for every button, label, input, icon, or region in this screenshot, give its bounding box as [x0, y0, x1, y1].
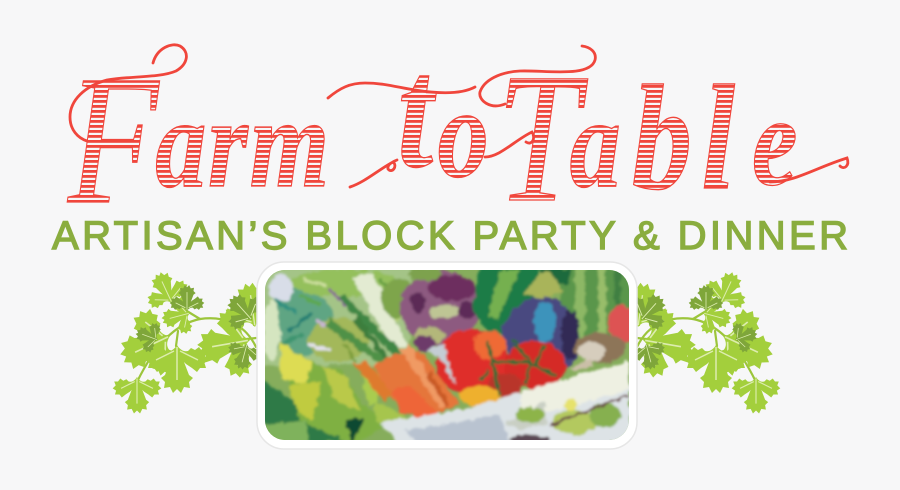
title swashes	[70, 45, 848, 187]
title lettering: e	[752, 71, 797, 213]
title lettering: T	[497, 37, 589, 241]
purple lettuce	[400, 268, 480, 351]
sprig leaves	[107, 264, 284, 413]
vegetable watercolor painting	[260, 265, 636, 446]
subtitle: ARTISAN’S BLOCK PARTY & DINNER	[52, 214, 848, 258]
red pepper	[608, 305, 636, 343]
white crate	[380, 344, 632, 446]
title lettering: a	[155, 73, 206, 215]
vegetable painting frame	[257, 262, 637, 449]
right sprig stems	[637, 302, 756, 382]
title: Farm to Table	[67, 25, 848, 243]
carrots	[352, 345, 460, 422]
leafy greens	[262, 342, 412, 445]
eggplant	[502, 272, 580, 372]
title lettering: l	[702, 55, 735, 221]
right cilantro sprig	[609, 264, 786, 413]
title lettering: t	[398, 25, 436, 201]
mushrooms	[570, 333, 626, 372]
title lettering: b	[632, 55, 692, 221]
title lettering: r	[208, 73, 249, 215]
title lettering: a	[570, 73, 621, 215]
sprig stems	[137, 302, 256, 382]
cucumber	[472, 265, 540, 335]
foliage background	[260, 265, 416, 365]
left cilantro sprig	[107, 264, 284, 413]
title lettering: o	[438, 63, 514, 205]
title lettering: m	[250, 73, 355, 215]
infographic canvas	[51, 43, 850, 450]
tomatoes	[436, 329, 566, 406]
asparagus	[538, 270, 629, 338]
right sprig leaves	[609, 264, 786, 413]
title lettering: F	[67, 39, 160, 243]
